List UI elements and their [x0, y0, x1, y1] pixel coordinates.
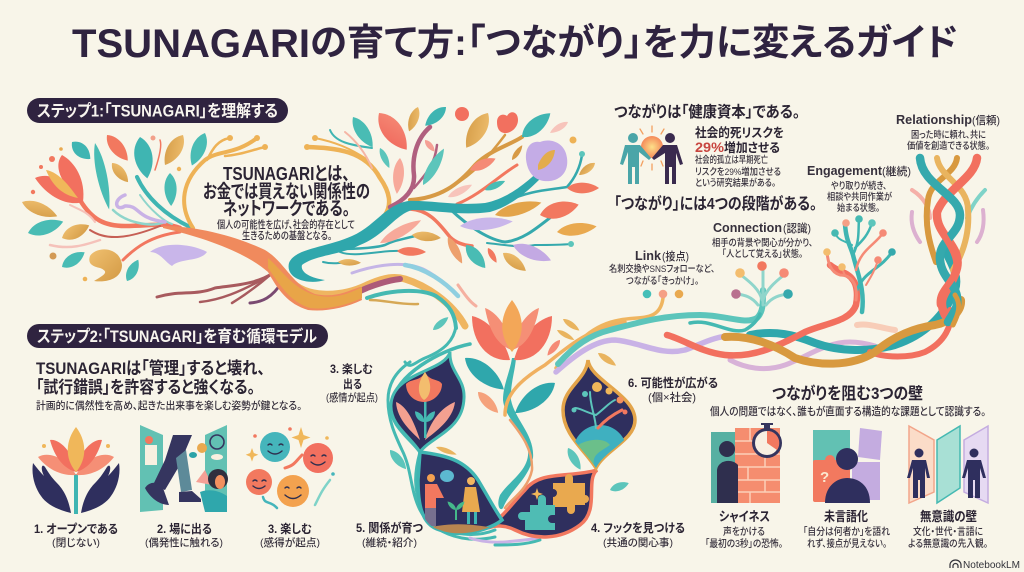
step 1 heading pill [27, 98, 288, 123]
label: unverbalized [803, 509, 890, 550]
stage text: engagement: Engagement [807, 163, 883, 178]
stage text: connection: Connection [713, 220, 782, 235]
cycle label: enjoy: 出る [343, 378, 362, 391]
cycle label: enjoy: 3. 楽しむ [330, 362, 373, 376]
cycle label: possibilities: (個×社会) [648, 390, 696, 404]
right leaves [338, 103, 599, 275]
stage pod: hands [391, 352, 464, 452]
label: shyness: 声をかける [723, 525, 765, 538]
stat: 29 percent: 社会的死リスクを [695, 125, 784, 140]
text block: TSUNAGARI definition: お金では買えない関係性の [203, 181, 370, 202]
stage text: link [609, 248, 715, 287]
text block: step 2 lead: 「試行錯誤」を許容すると強くなる。 [36, 377, 255, 397]
right branches [307, 127, 582, 263]
stage pod: hook puzzle [488, 470, 597, 537]
cycle label: possibilities: 6. 可能性が広がる [628, 375, 718, 390]
text block: TSUNAGARI definition: ネットワークである。 [223, 198, 350, 219]
cycle label: find a hook: (共通の関心事) [603, 536, 673, 549]
step 2 heading pill: ステップ2:「TSUNAGARI」を育む循環モデル [37, 326, 317, 346]
label: unverbalized: 「自分は何者か」を語れ [803, 525, 890, 538]
label: enjoy [260, 521, 320, 549]
label: open: 1. オープンである [34, 522, 118, 536]
stat: 29 percent: 29% [695, 139, 725, 155]
text block: step 2 lead: 計画的に偶然性を高め、起きた出来事を楽しむ姿勢が鍵となる。 [36, 399, 302, 412]
heading: three walls: つながりを阻む3つの壁 [772, 383, 923, 403]
lower lilac [730, 342, 875, 369]
stat: 29 percent: 社会的孤立は早期死亡 [695, 154, 768, 166]
title: TSUNAGARI [72, 22, 310, 66]
left branches [50, 138, 265, 260]
label: unverbalized: 未言語化 [824, 509, 868, 524]
stage text: link: (接点) [662, 249, 689, 263]
stage text: link: 名刺交換やSNSフォローなど、 [609, 263, 715, 275]
engagement tree [823, 215, 896, 312]
label: shyness: シャイネス [719, 509, 770, 524]
cycle label: relationship grows [356, 520, 423, 549]
heading: three walls: 個人の問題ではなく、誰もが直面する構造的な課題として認識する。 [710, 404, 986, 418]
ribbons: stages of connection [556, 215, 961, 372]
icon: stepping out [140, 425, 228, 512]
connection ribbon [558, 290, 763, 364]
label: shyness: 「最初の3秒」の恐怖。 [705, 537, 783, 550]
stage text: engagement: (継続) [882, 164, 911, 178]
stage text: engagement: 始まる状態。 [837, 202, 880, 214]
stage text: relationship: Relationship [896, 112, 972, 127]
stage pod: nurture [415, 452, 502, 540]
coral tulip [497, 112, 518, 133]
label: unverbalized: れず、接点が見えない。 [807, 537, 887, 550]
stage text: connection: 「人として覚える」状態。 [722, 248, 803, 260]
label: open [34, 522, 118, 549]
central lotus [472, 300, 552, 360]
gold and plum ribbons from trunk [290, 264, 476, 365]
stat: 29 percent [695, 125, 784, 189]
label: open: (閉じない) [52, 537, 100, 549]
label: enjoy: (感得が起点) [260, 536, 320, 549]
stage text: engagement: やり取りが続き、 [831, 180, 887, 192]
gold ribbon [725, 300, 961, 364]
stat: 29 percent: リスクを29%増加させる [695, 166, 781, 178]
title [72, 22, 958, 66]
text block: TSUNAGARI definition [203, 163, 370, 242]
cycle label: enjoy: (感情が起点) [326, 391, 378, 404]
notebooklm mark: NotebookLM [963, 559, 1020, 571]
cycle label: possibilities [628, 375, 718, 404]
stage text: connection [712, 220, 813, 260]
label: unconscious wall: 文化・世代・言語に [913, 525, 983, 538]
roots [157, 272, 282, 303]
icon: smiling faces [246, 427, 335, 508]
label: enjoy: 3. 楽しむ [268, 521, 312, 536]
central coral-to-gold trunk [163, 226, 362, 311]
icon: shyness wall [711, 423, 782, 503]
label: go out: 2. 場に出る [157, 521, 212, 536]
text block: TSUNAGARI definition: TSUNAGARIとは、 [223, 163, 350, 184]
cycle label: find a hook: 4. フックを見つける [591, 521, 685, 535]
label: unconscious wall: 無意識の壁 [920, 509, 977, 524]
icon: unconscious wall [907, 426, 988, 503]
stage text: link: Link [635, 248, 662, 263]
label: go out: (偶発性に触れる) [145, 536, 223, 549]
step 1 heading pill: ステップ1:「TSUNAGARI」を理解する [37, 102, 278, 120]
stage text: relationship: 困った時に頼れ、共に [911, 129, 986, 141]
icon: unverbalized puzzle: ? [820, 469, 829, 486]
cycle label: enjoy [326, 362, 378, 404]
peach ribbon [857, 325, 895, 330]
cycle label: relationship grows: 5. 関係が育つ [356, 520, 423, 535]
heading: health capital: つながりは「健康資本」である。 [614, 102, 800, 121]
small flower [455, 107, 469, 121]
stat: 29 percent: という研究結果がある。 [695, 177, 776, 189]
lilac ribbon [556, 336, 735, 372]
coral ribbon [667, 265, 857, 355]
icon: unverbalized puzzle [813, 428, 882, 503]
lilac splash [150, 245, 207, 266]
stage pod: possibility [563, 360, 635, 479]
cycle diagram [387, 300, 635, 545]
stage text: relationship: 価値を創造できる状態。 [907, 140, 990, 152]
link stem [556, 298, 663, 368]
left tulip [35, 155, 83, 203]
cycle label: find a hook [591, 521, 685, 549]
heading: four stages: 「つながり」には4つの段階がある。 [614, 194, 817, 213]
stage text: relationship [896, 112, 1000, 152]
connection tree [731, 261, 793, 305]
purple flower [526, 141, 567, 181]
step 2 heading pill [27, 324, 328, 348]
stage text: link: つながる「きっかけ」。 [626, 275, 699, 287]
text block: TSUNAGARI definition: 生きるための基盤となる。 [242, 229, 332, 242]
label: go out [145, 521, 223, 549]
label: unconscious wall [908, 509, 988, 550]
teal ribbon [750, 250, 956, 350]
illustration: TSUNAGARI tree [20, 103, 599, 365]
stage text: relationship: (信頼) [972, 113, 1000, 127]
stage text: engagement [807, 163, 911, 214]
icon: lotus and hands [32, 427, 120, 514]
text block: step 2 lead [36, 358, 302, 412]
main teal branch [289, 162, 552, 282]
icon: two people with sun [620, 126, 683, 184]
relationship braid [912, 158, 985, 325]
outer vines [387, 315, 630, 545]
stage text: connection: 相手の背景や関心が分かり、 [712, 237, 813, 249]
label: unconscious wall: よる無意識の先入観。 [908, 537, 988, 550]
central stem [435, 317, 625, 509]
stage text: connection: (認識) [783, 222, 811, 235]
text block: step 2 lead: TSUNAGARIは「管理」すると壊れ、 [36, 358, 265, 378]
label: shyness [705, 509, 783, 550]
stat: 29 percent: 増加させる [724, 140, 780, 155]
heading: three walls [710, 383, 986, 418]
cycle label: relationship grows: (維続・紹介) [362, 536, 417, 549]
title: の育て方:「つながり」を力に変えるガイド [310, 22, 958, 63]
stage text: engagement: 相談や共同作業が [827, 191, 893, 203]
left leaves [20, 130, 318, 283]
text block: TSUNAGARI definition: 個人の可能性を広げ、社会的存在として [217, 218, 355, 231]
left round bud [89, 249, 122, 281]
link dots [643, 290, 683, 298]
